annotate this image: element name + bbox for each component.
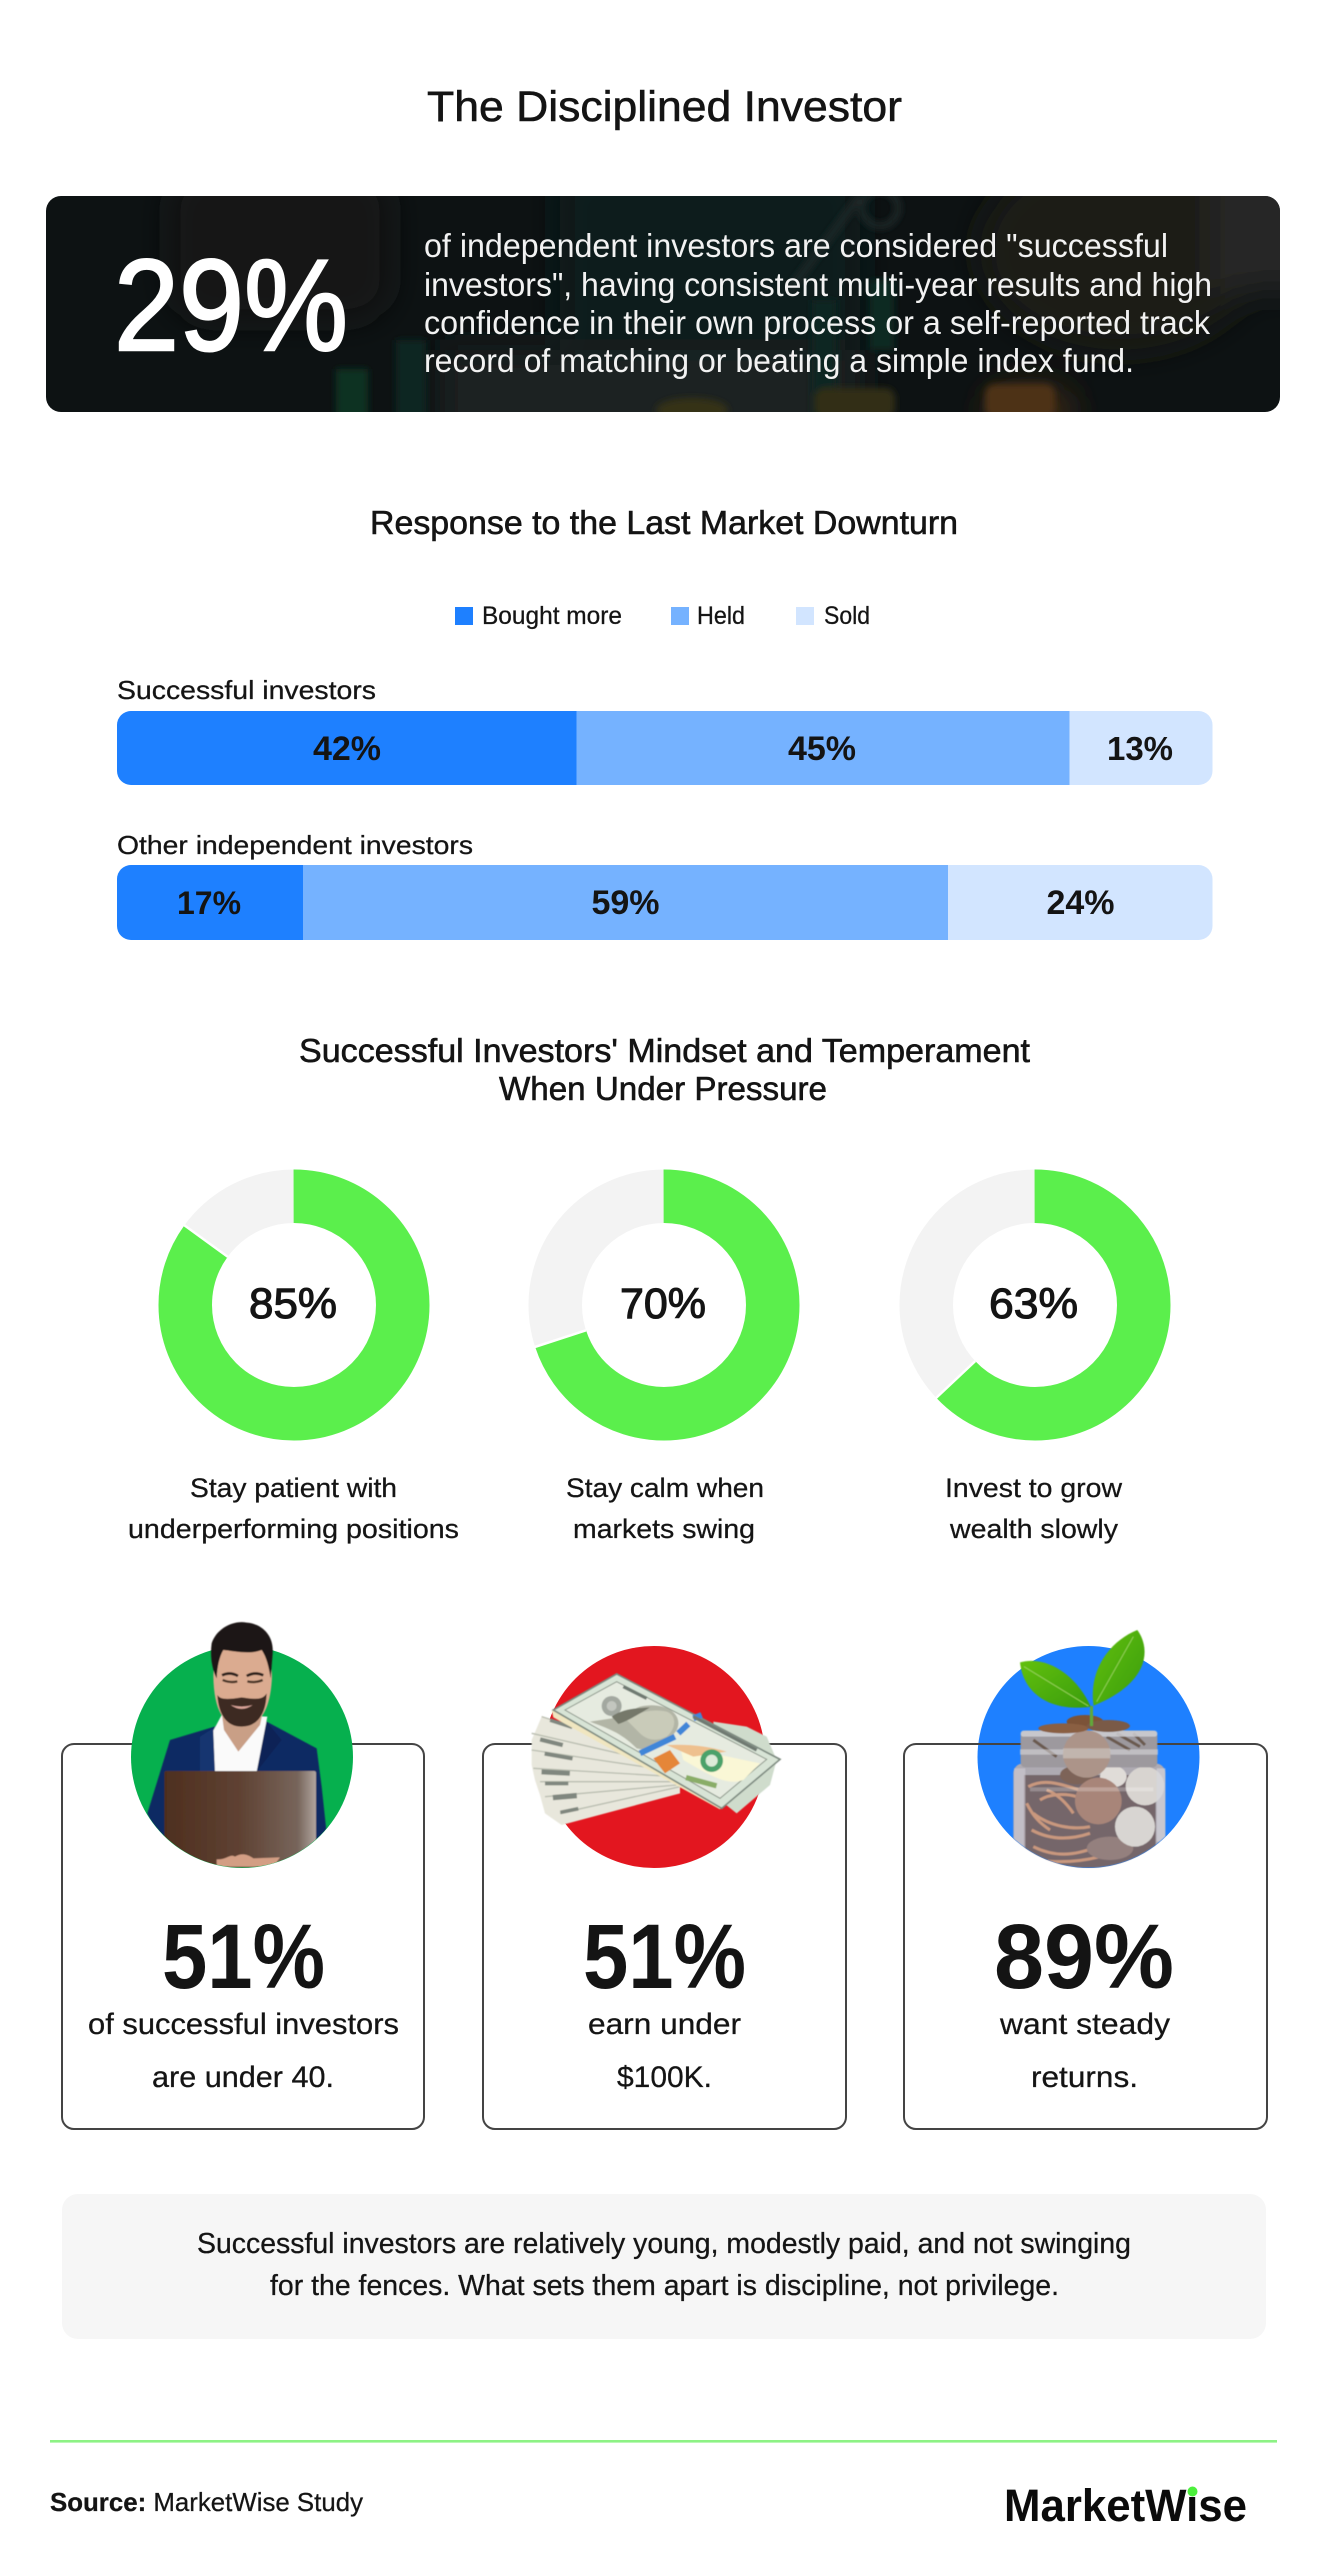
donut chart: 85% patient: underperforming positions bbox=[128, 1514, 459, 1544]
banner big number: 29% bbox=[114, 232, 348, 378]
card: steady returns: 89% bbox=[994, 1906, 1174, 2008]
bar chart: other independent investors bbox=[117, 830, 1212, 940]
callout: takeaway: for the fences. What sets them apart is discipline, not privilege. bbox=[270, 2270, 1059, 2302]
donut chart: 85% patient bbox=[128, 1196, 459, 1544]
heading: market downturn: Response to the Last Market Downturn bbox=[370, 504, 958, 541]
card: steady returns: want steady bbox=[999, 2008, 1170, 2041]
card: under 100K: earn under bbox=[588, 2008, 741, 2041]
bar chart: successful investors: Successful investors bbox=[117, 675, 376, 705]
donut chart: 70% calm: markets swing bbox=[573, 1514, 755, 1544]
callout: takeaway: Successful investors are relatively young, modestly paid, and not swinging bbox=[197, 2228, 1131, 2260]
bar chart: successful investors: 42% bbox=[313, 730, 381, 768]
bar chart: other independent investors: 59% bbox=[591, 884, 660, 922]
banner description: confidence in their own process or a self-reported track bbox=[424, 304, 1210, 341]
heading: mindset and temperament: When Under Pressure bbox=[499, 1070, 827, 1107]
banner description bbox=[424, 227, 1212, 379]
donut chart: 85% patient: Stay patient with bbox=[190, 1473, 397, 1503]
card: under 100K: 51% bbox=[583, 1906, 746, 2008]
donut chart: 63% grow wealth bbox=[926, 1196, 1144, 1544]
card: under 40: are under 40. bbox=[152, 2061, 334, 2094]
card: under 100K bbox=[483, 1744, 846, 2129]
callout: takeaway bbox=[62, 2194, 1266, 2339]
icon: coin jar backing circle on blue bbox=[978, 1646, 1200, 1868]
icon: coin jar with sprout bbox=[1013, 1630, 1165, 1873]
heading: mindset and temperament bbox=[299, 1032, 1030, 1107]
bar chart: successful investors: 45% bbox=[788, 730, 856, 768]
donut chart: 63% grow wealth: wealth slowly bbox=[949, 1514, 1119, 1544]
bar chart: successful investors bbox=[117, 675, 1212, 785]
bar chart: other independent investors: Other independent investors bbox=[117, 830, 473, 860]
card: under 100K: $100K. bbox=[617, 2061, 712, 2094]
logo: MarketWise: MarketWise bbox=[1004, 2480, 1247, 2531]
chart legend: Sold bbox=[824, 602, 870, 630]
source line: Source: MarketWise Study bbox=[50, 2487, 363, 2517]
card: steady returns bbox=[904, 1744, 1267, 2129]
donut chart: 70% calm: Stay calm when bbox=[566, 1473, 764, 1503]
banner description: investors", having consistent multi-year results and high bbox=[424, 266, 1212, 303]
card: steady returns: returns. bbox=[1031, 2061, 1138, 2094]
panel: headline stat banner bbox=[46, 196, 1280, 412]
card: under 40: 51% bbox=[162, 1906, 325, 2008]
bar chart: other independent investors: 17% bbox=[177, 885, 241, 921]
banner description: record of matching or beating a simple index fund. bbox=[424, 342, 1134, 379]
donut chart: 85% patient: 85% bbox=[249, 1280, 337, 1328]
banner photo background bbox=[46, 196, 1280, 412]
donut chart: 70% calm: 70% bbox=[620, 1280, 706, 1328]
chart legend bbox=[455, 602, 870, 630]
bar chart: other independent investors: 24% bbox=[1046, 884, 1115, 922]
donut chart: 63% grow wealth: Invest to grow bbox=[945, 1473, 1123, 1503]
icon: man with laptop on green circle bbox=[131, 1622, 353, 1868]
banner description: of independent investors are considered "successful bbox=[424, 227, 1168, 264]
bar chart: successful investors: 13% bbox=[1107, 730, 1173, 767]
chart legend: Held bbox=[697, 602, 745, 630]
title: The Disciplined Investor bbox=[427, 83, 902, 131]
donut chart: 63% grow wealth: 63% bbox=[989, 1280, 1078, 1328]
card: under 40: of successful investors bbox=[88, 2008, 399, 2041]
icon: dollar bills on red circle bbox=[532, 1646, 780, 1868]
heading: mindset and temperament: Successful Investors' Mindset and Temperament bbox=[299, 1032, 1030, 1069]
donut chart: 70% calm bbox=[535, 1196, 773, 1544]
chart legend: Bought more bbox=[482, 602, 622, 630]
card: under 40 bbox=[62, 1744, 424, 2129]
